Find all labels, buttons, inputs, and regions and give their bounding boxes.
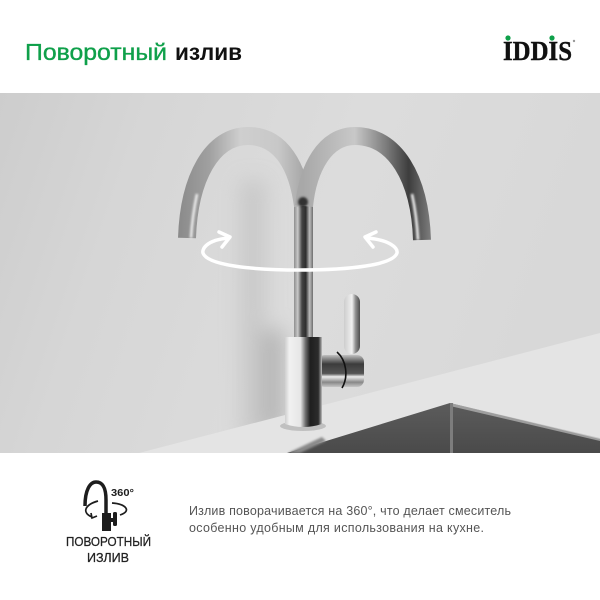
- photo: faucet on kitchen counter: [0, 93, 600, 453]
- icon label: [66, 534, 151, 565]
- description: особенно удобным для использования на кухне.: [189, 521, 484, 535]
- icon: faucet with 360 rotation: [85, 482, 134, 531]
- title: [25, 39, 242, 65]
- side cylinder: [318, 355, 364, 387]
- faucet shadow on wall: [240, 180, 284, 440]
- base foot: [280, 423, 326, 431]
- spout: right position: [304, 136, 422, 240]
- spout: left position: [187, 136, 303, 238]
- base body: [285, 337, 322, 427]
- description: Излив поворачивается на 360°, что делает смеситель: [189, 504, 511, 518]
- wall: [0, 93, 600, 453]
- spout stem: [294, 198, 313, 343]
- icon: faucet with 360 rotation: 360°: [111, 488, 134, 499]
- title: излив: [175, 39, 242, 65]
- logo: IDDIS: IDDIS: [503, 36, 572, 66]
- countertop: [139, 333, 600, 453]
- title: Поворотный: [25, 39, 167, 65]
- sink basin: [287, 403, 600, 453]
- icon label: ПОВОРОТНЫЙ: [66, 534, 151, 549]
- rotation arrow: [203, 232, 397, 270]
- description: [189, 504, 511, 535]
- spout joint: [298, 197, 308, 207]
- icon label: ИЗЛИВ: [87, 551, 129, 565]
- faucet: [187, 136, 422, 431]
- reflection on counter: [288, 437, 326, 453]
- lever handle: [344, 294, 360, 354]
